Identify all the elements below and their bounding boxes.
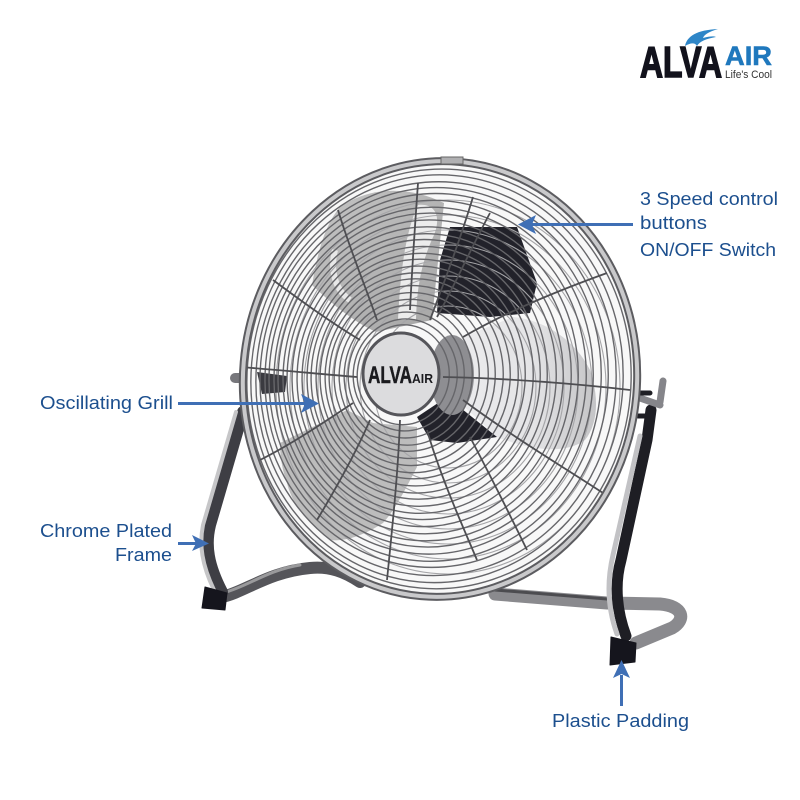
hub ALVA text: ALVA	[368, 362, 412, 389]
arrow: plastic padding	[613, 660, 630, 706]
upper blade	[312, 191, 444, 332]
upper blade highlight	[398, 205, 437, 320]
logo wordmark AIR: AIR	[725, 41, 772, 71]
pivot bracket	[634, 381, 663, 405]
logo wordmark ALVA: ALVA	[640, 38, 722, 87]
right blade	[457, 317, 596, 449]
left pivot knob	[235, 373, 245, 383]
left base tube	[222, 568, 360, 597]
upper blade inner fold	[333, 250, 350, 300]
right upright	[617, 410, 651, 636]
label: speed control: 3 Speed control	[640, 189, 778, 209]
left foot	[202, 587, 227, 610]
fan head	[224, 145, 656, 613]
right base tube	[495, 594, 681, 643]
lower left blade	[280, 410, 417, 540]
logo swoosh	[685, 29, 718, 46]
arrow: oscillating grill	[178, 394, 319, 413]
lower dark motor	[417, 397, 497, 443]
outer rim	[225, 145, 655, 613]
label: frame: Frame	[115, 545, 172, 565]
cage backdrop	[224, 145, 656, 613]
top clip	[441, 157, 463, 164]
grill rings	[229, 153, 649, 605]
brand logo	[640, 29, 772, 87]
hub ring	[363, 333, 439, 415]
fan stand frame	[201, 378, 681, 665]
hub badge	[363, 333, 439, 415]
left upright	[208, 412, 243, 592]
label: plastic padding: Plastic Padding	[552, 711, 689, 731]
motor housing	[437, 227, 537, 317]
logo tagline: Life's Cool	[725, 69, 772, 81]
label: oscillating grill: Oscillating Grill	[40, 393, 173, 413]
label: chrome plated: Chrome Plated	[40, 521, 172, 541]
arrow: chrome frame	[178, 535, 209, 551]
hub back ring	[430, 335, 474, 415]
arrow: speed control	[518, 215, 633, 234]
left pivot mechanism	[257, 372, 287, 394]
radial grill wires	[240, 183, 630, 580]
rear grill rings	[276, 200, 620, 574]
right foot	[610, 637, 636, 665]
hub AIR text: AIR	[412, 371, 434, 386]
label: buttons: buttons	[640, 213, 707, 233]
label: on/off switch: ON/OFF Switch	[640, 240, 776, 260]
